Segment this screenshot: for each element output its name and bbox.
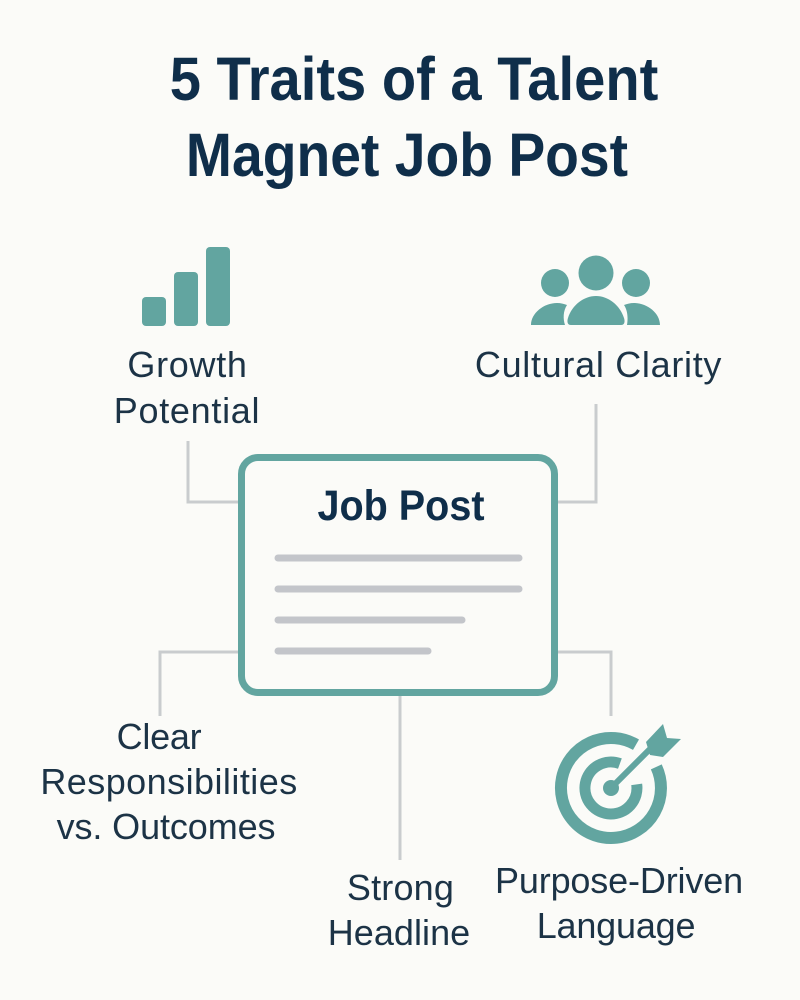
- label: clear responsibilities: Clear: [117, 716, 201, 757]
- title: 5 Traits of a Talent: [170, 45, 658, 113]
- label: growth potential: Potential: [114, 390, 260, 431]
- label: growth potential: Growth: [127, 344, 248, 385]
- label: purpose-driven language: [495, 860, 743, 946]
- icon: bar chart: [142, 247, 230, 326]
- label: strong headline: Headline: [328, 912, 470, 953]
- panel: job post card: [238, 454, 558, 696]
- title: [170, 45, 658, 189]
- label: cultural clarity: Cultural Clarity: [475, 344, 722, 385]
- icon: target with arrow: [554, 724, 681, 844]
- label: strong headline: Strong: [347, 867, 454, 908]
- label: clear responsibilities: Responsibilities: [40, 761, 298, 802]
- card text lines: [274, 554, 522, 654]
- label: growth potential: [114, 344, 260, 431]
- label: clear responsibilities: [40, 716, 298, 847]
- icon: people: [531, 256, 660, 325]
- title: Magnet Job Post: [186, 121, 628, 189]
- label: clear responsibilities: vs. Outcomes: [57, 806, 275, 847]
- card heading: Job Post: [317, 482, 485, 530]
- label: purpose-driven language: Purpose-Driven: [495, 860, 743, 901]
- label: strong headline: [328, 867, 470, 953]
- label: purpose-driven language: Language: [537, 905, 695, 946]
